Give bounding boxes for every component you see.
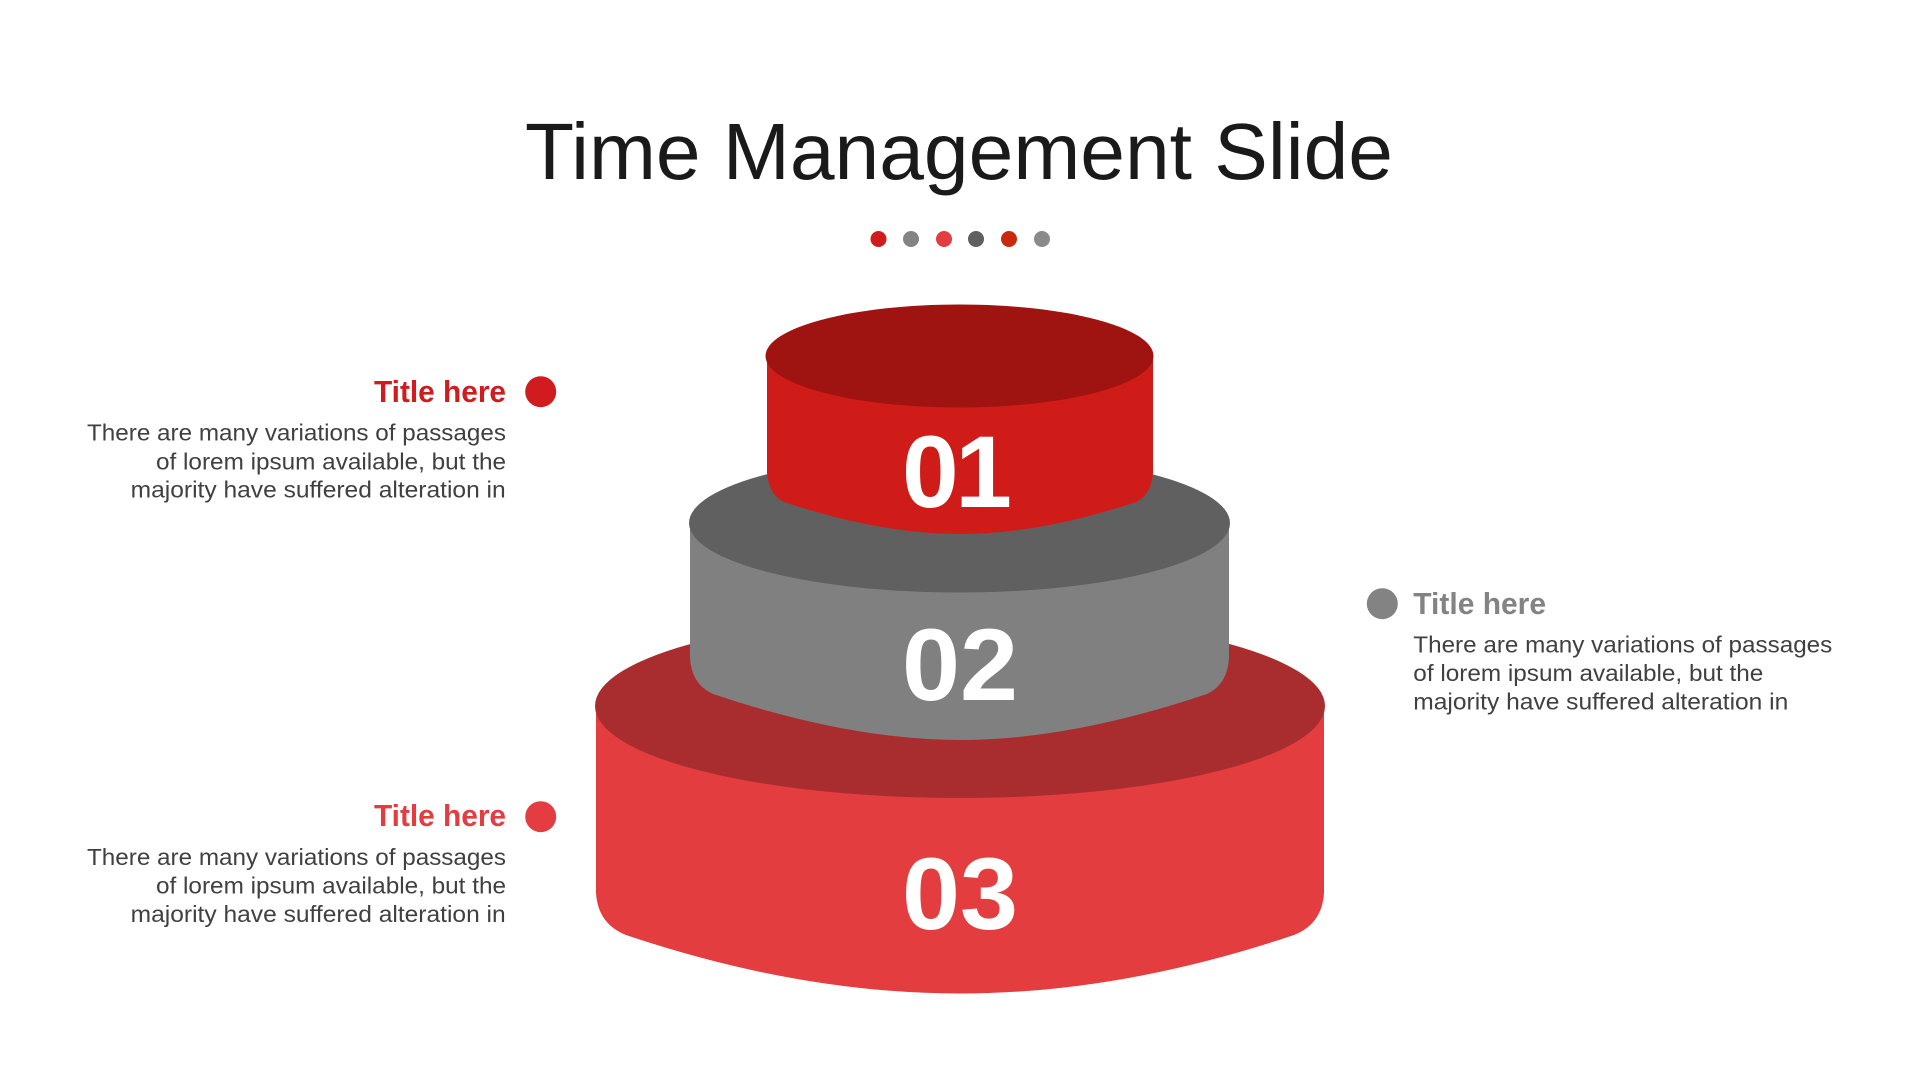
tier 02 xyxy=(689,454,1230,740)
tier 01 xyxy=(766,304,1154,534)
heading: item 1: Title here xyxy=(374,374,506,409)
body text: item 1: of lorem ipsum available, but the xyxy=(156,448,506,474)
body text: item 2 xyxy=(1413,632,1832,714)
body text: item 2: majority have suffered alteration in xyxy=(1413,688,1788,714)
number 02: 02 xyxy=(902,608,1018,722)
body text: item 2: There are many variations of passages xyxy=(1413,632,1832,658)
callout: item 1 xyxy=(87,374,556,503)
title: Time Management Slide xyxy=(525,107,1393,196)
body text: item 3: majority have suffered alteration in xyxy=(131,901,506,927)
body text: item 3 xyxy=(87,844,506,927)
body text: item 3: There are many variations of passages xyxy=(87,844,506,870)
body text: item 1: There are many variations of passages xyxy=(87,420,506,446)
marker: item 1 xyxy=(525,376,556,407)
number 03: 03 xyxy=(902,837,1018,951)
body text: item 1 xyxy=(87,420,506,503)
body text: item 2: of lorem ipsum available, but the xyxy=(1413,660,1763,686)
marker: item 3 xyxy=(525,801,556,832)
number 01: 01 xyxy=(902,415,1012,529)
body text: item 3: of lorem ipsum available, but the xyxy=(156,873,506,899)
body text: item 1: majority have suffered alteration in xyxy=(131,477,506,503)
heading: item 2: Title here xyxy=(1413,586,1546,621)
marker: item 2 xyxy=(1367,588,1398,619)
callout: item 3 xyxy=(87,798,556,927)
decorative dot row xyxy=(870,231,1050,247)
callout: item 2 xyxy=(1367,586,1832,714)
tier 03 xyxy=(595,614,1325,994)
heading: item 3: Title here xyxy=(374,798,506,833)
